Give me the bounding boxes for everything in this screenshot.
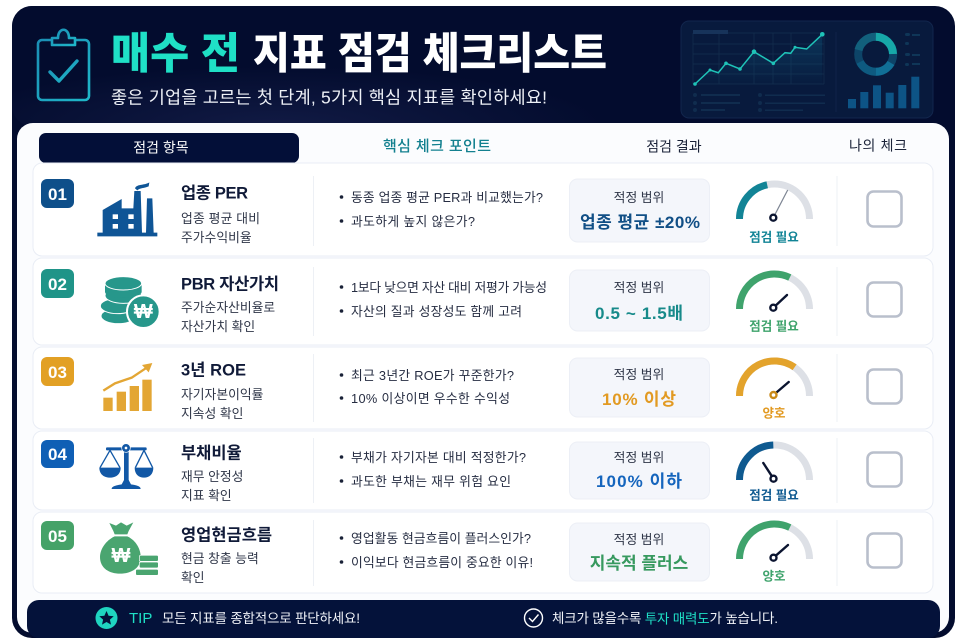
badge 02: 02: [48, 275, 67, 294]
badge 04: [41, 440, 74, 468]
icon: rising bars: [103, 363, 152, 411]
gauge: 양호: [762, 570, 786, 584]
gauge: [740, 274, 810, 334]
gauge: 점검 필요: [749, 231, 799, 245]
description: 주가순자산비율로: [181, 300, 275, 315]
description: [181, 387, 264, 421]
column header: 나의 체크: 나의 체크: [849, 138, 907, 154]
check points: 최근 3년간 ROE가 꾸준한가?: [351, 368, 514, 383]
panel: row 05 영업현금흐름: [33, 512, 933, 593]
range box: 지속적 플러스: [590, 554, 688, 573]
panel: row 04 부채비율: [33, 431, 933, 510]
gauge: 점검 필요: [749, 320, 799, 334]
description: 지표 확인: [181, 488, 232, 503]
heading: 업종 PER: [181, 184, 248, 203]
icon: coins with won: [100, 277, 160, 328]
panel: row 03 3년 ROE: [33, 347, 933, 429]
description: 주가수익비율: [181, 230, 252, 245]
range box: 적정 범위: [614, 367, 664, 382]
gauge: [740, 524, 810, 584]
description: [181, 469, 243, 503]
icon: clipboard with check: [38, 30, 89, 100]
description: 지속성 확인: [181, 406, 243, 421]
check points: [340, 531, 533, 570]
check points: 동종 업종 평균 PER과 비교했는가?: [351, 190, 543, 205]
column header: 핵심 체크 포인트: 핵심 체크 포인트: [383, 138, 491, 155]
badge 05: 05: [48, 527, 67, 546]
check points: 자산의 질과 성장성도 함께 고려: [351, 304, 522, 319]
check points: 이익보다 현금흐름이 중요한 이유!: [351, 555, 533, 570]
range box: [570, 358, 710, 417]
description: 재무 안정성: [181, 469, 243, 484]
icon: coins with won: ₩: [134, 301, 153, 323]
check points: [340, 280, 547, 319]
range box: 10% 이상: [602, 390, 676, 409]
checkbox: [868, 534, 902, 568]
check points: 부채가 자기자본 대비 적정한가?: [351, 450, 526, 465]
badge 03: [41, 357, 74, 386]
dashboard illustration: [681, 21, 933, 118]
description: 확인: [181, 570, 205, 585]
check points: [340, 368, 514, 406]
panel: row 02 PBR 자산가치: [33, 258, 933, 345]
badge 04: 04: [48, 445, 67, 464]
check points: 1보다 낮으면 자산 대비 저평가 가능성: [351, 280, 547, 295]
check points: 영업활동 현금흐름이 플러스인가?: [351, 531, 531, 546]
gauge: [740, 184, 810, 245]
title: [111, 31, 607, 79]
heading: 영업현금흐름: [181, 526, 272, 545]
checkbox: [868, 370, 902, 404]
tip text: 모든 지표를 종합적으로 판단하세요!: [162, 611, 360, 626]
icon: factory: [97, 182, 157, 236]
check points: 과도하게 높지 않은가?: [351, 214, 475, 229]
subtitle: 좋은 기업을 고르는 첫 단계, 5가지 핵심 지표를 확인하세요!: [111, 88, 547, 108]
tip label: TIP: [129, 610, 152, 627]
range box: 100% 이하: [596, 472, 682, 491]
checkbox: [868, 192, 902, 226]
gauge: 점검 필요: [749, 489, 799, 503]
gauge: [740, 445, 810, 503]
description: [181, 300, 275, 334]
range box: [570, 179, 710, 242]
range box: 업종 평균 ±20%: [580, 213, 700, 232]
heading: 3년 ROE: [181, 361, 246, 380]
column header: 점검 항목: 점검 항목: [133, 140, 189, 156]
check points: [340, 450, 526, 489]
description: [181, 211, 260, 245]
badge 02: [41, 269, 74, 298]
title: 매수 전: [111, 31, 240, 79]
description: 자산가치 확인: [181, 319, 255, 334]
range box: [570, 270, 710, 331]
icon: money bag: ₩: [112, 545, 131, 567]
badge 01: 01: [48, 185, 67, 204]
description: 자기자본이익률: [181, 387, 264, 402]
heading: PBR 자산가치: [181, 275, 279, 294]
check points: 10% 이상이면 우수한 수익성: [351, 391, 510, 406]
panel: row 01 업종 PER: [33, 163, 933, 256]
badge 05: [41, 521, 74, 550]
checkbox: [868, 452, 902, 486]
heading: 부채비율: [181, 444, 242, 463]
badge 01: [41, 179, 74, 208]
range box: 적정 범위: [614, 532, 664, 547]
check points: 과도한 부채는 재무 위험 요인: [351, 474, 511, 489]
range box: 0.5 ~ 1.5배: [595, 304, 683, 323]
icon: star badge: [96, 607, 118, 629]
range box: 적정 범위: [614, 190, 664, 205]
range box: 적정 범위: [614, 450, 664, 465]
description: [181, 551, 259, 585]
description: 업종 평균 대비: [181, 211, 260, 226]
column header: 점검 결과: 점검 결과: [646, 139, 702, 155]
range box: [570, 523, 710, 581]
description: 현금 창출 능력: [181, 551, 259, 566]
column header: 점검 항목: [39, 133, 299, 163]
icon: balance scale: [99, 444, 153, 489]
icon: money bag: [100, 522, 158, 575]
title: 지표 점검 체크리스트: [253, 31, 607, 79]
gauge: [740, 361, 810, 421]
checkbox: [868, 282, 902, 316]
range box: 적정 범위: [614, 280, 664, 295]
gauge: 양호: [762, 407, 786, 421]
range box: [570, 442, 710, 499]
panel: white checklist body: [17, 123, 949, 633]
tip bar: [27, 600, 940, 638]
check points: [340, 190, 543, 229]
icon: check circle: [524, 609, 542, 627]
badge 03: 03: [48, 363, 67, 382]
investment note: 체크가 많을수록 투자 매력도가 높습니다.: [552, 611, 778, 626]
